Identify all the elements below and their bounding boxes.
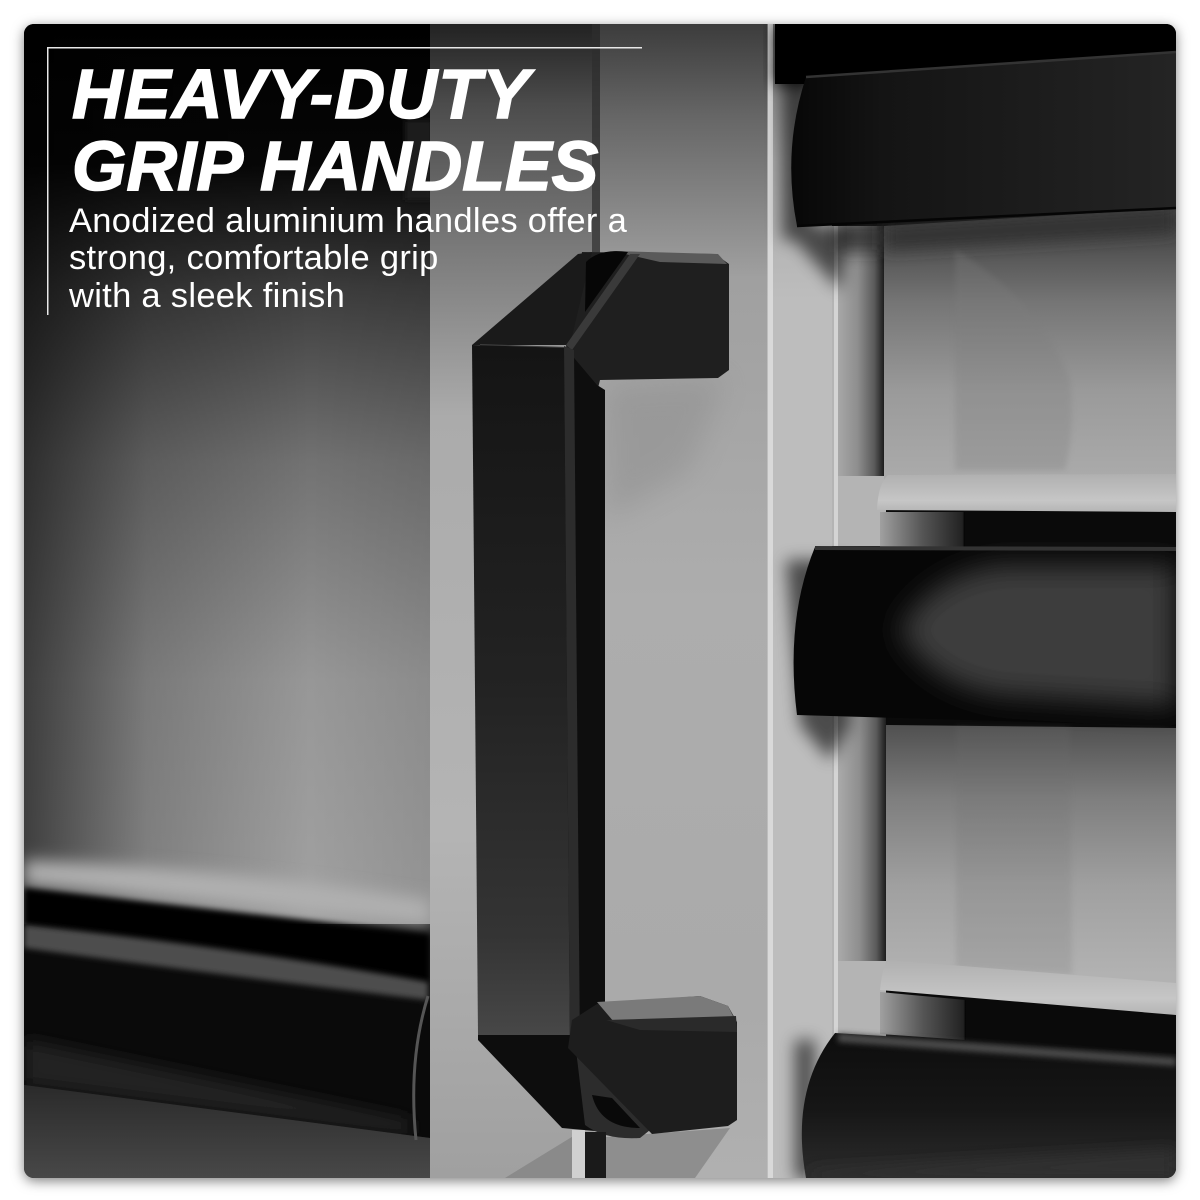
curved clip: [577, 1058, 649, 1138]
black slat bottom: [802, 1033, 1176, 1178]
title: HEAVY-DUTY: [72, 55, 531, 133]
bar front face: [472, 345, 572, 1048]
title: GRIP HANDLES: [72, 127, 598, 205]
top foot: [566, 252, 729, 392]
door stile: [600, 24, 837, 1178]
title: [72, 55, 598, 205]
lower wing: [478, 1035, 606, 1132]
text frame lines: [47, 47, 642, 315]
rod below handle: [585, 1132, 606, 1178]
left panel: [24, 24, 432, 1178]
grip handle: [472, 251, 737, 1138]
shadow around black slats: [782, 70, 850, 1178]
black slat top: [775, 24, 1176, 226]
right louvre panels: [832, 24, 1176, 1178]
description text: Anodized aluminium handles offer a: [69, 202, 627, 240]
black slat middle: [794, 547, 1176, 726]
frame stile: [430, 24, 600, 1178]
description text: strong, comfortable grip: [69, 239, 439, 277]
description text: with a sleek finish: [69, 277, 345, 315]
inner strip: [564, 346, 605, 1075]
bottom foot: [568, 996, 737, 1134]
description text: [69, 202, 627, 315]
